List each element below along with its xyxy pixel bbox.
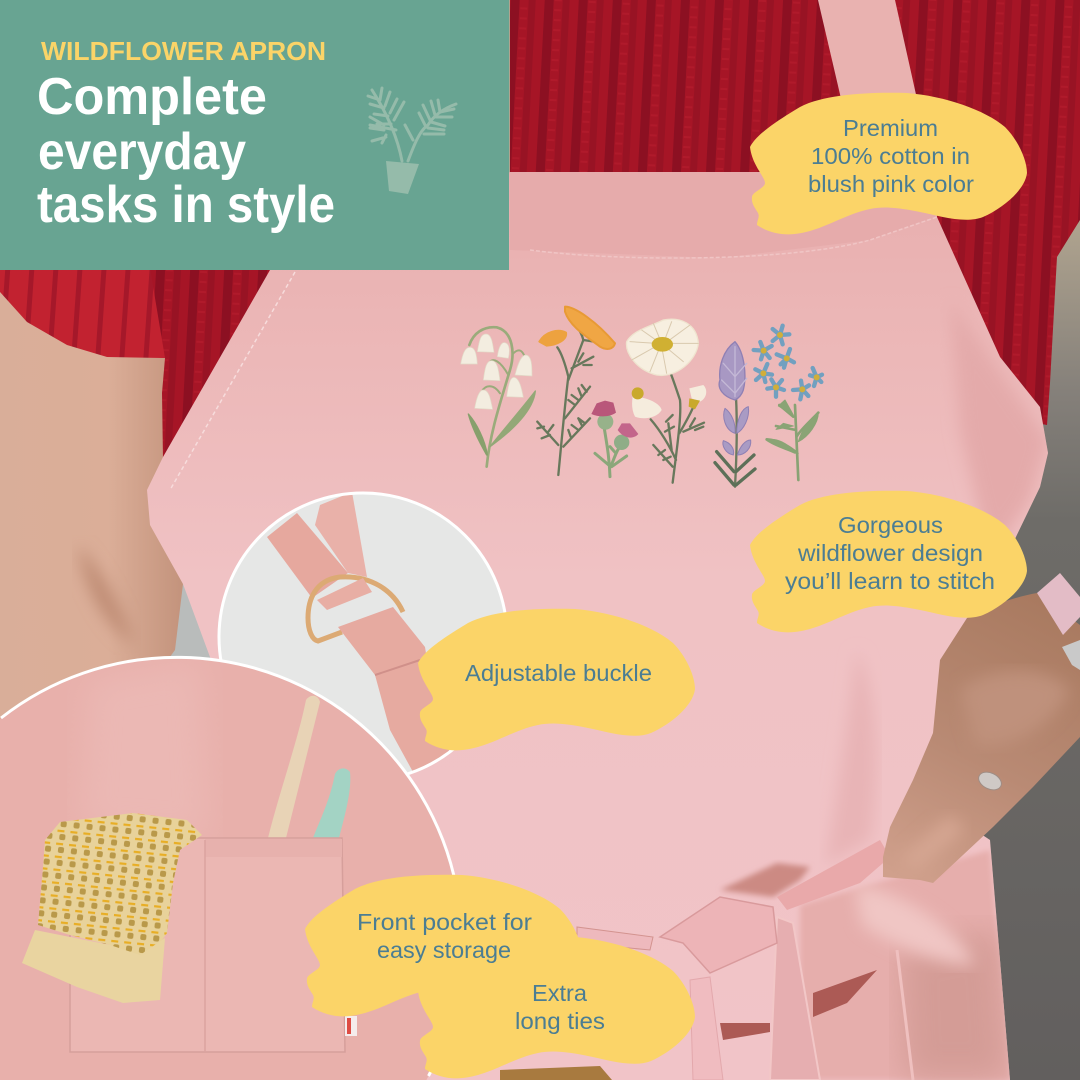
red sleeve left	[0, 268, 180, 358]
callout: front pocket	[305, 875, 582, 1016]
thistle	[591, 401, 638, 477]
upper left strap	[267, 513, 348, 598]
red sweater under arm	[150, 268, 290, 460]
daisy	[627, 319, 706, 483]
lower strap	[338, 607, 450, 772]
hanging tie right	[770, 917, 820, 1080]
upper right strap	[315, 492, 367, 577]
title: tasks in style	[37, 176, 335, 234]
callout text: extra long ties	[515, 980, 605, 1034]
callout: front pocket: easy storage	[377, 937, 511, 963]
embroidered wildflowers	[461, 307, 822, 487]
icon: potted plant	[368, 88, 456, 194]
callout: premium cotton: Premium	[843, 115, 938, 141]
red sweater right and neck	[510, 0, 1080, 425]
towel fringe	[22, 930, 165, 1003]
right hand	[883, 573, 1080, 883]
callout: premium cotton	[750, 93, 1027, 234]
callout: premium cotton: blush pink color	[808, 171, 974, 197]
callout: premium cotton: 100% cotton in	[811, 143, 970, 169]
left waist ribbon	[577, 927, 653, 950]
callout text: extra long ties: Extra	[532, 980, 587, 1006]
side seam	[170, 272, 295, 490]
icon: D-ring buckle	[308, 577, 403, 641]
icon: wooden spoon	[268, 696, 320, 838]
callout: wildflower design: you’ll learn to stitch	[785, 568, 995, 594]
callout: front pocket: Front pocket for	[357, 909, 532, 935]
header panel	[0, 0, 509, 270]
woven item at bottom edge	[500, 1066, 612, 1080]
shadow above tie	[720, 863, 810, 897]
yarrow and tansy	[537, 307, 615, 475]
folded towel	[38, 813, 202, 955]
hanging tie left	[690, 977, 723, 1080]
bow knot	[660, 897, 777, 973]
watch clasp	[1062, 640, 1080, 670]
lily of the valley	[461, 327, 535, 467]
fabric folds and shading	[522, 250, 1048, 1080]
left arm	[0, 285, 183, 735]
gap behind arm	[165, 570, 225, 670]
pocket	[70, 838, 345, 1052]
forget-me-not	[754, 326, 822, 480]
icon: ring	[976, 769, 1004, 793]
callout: adjustable buckle: Adjustable buckle	[465, 660, 652, 686]
callout shape: extra long ties	[418, 937, 695, 1078]
side pocket opening	[720, 970, 877, 1040]
apron body	[147, 172, 1048, 1080]
eyebrow: WILDFLOWER APRON	[41, 36, 326, 66]
neck strap	[818, 0, 935, 180]
watch strap	[1037, 573, 1080, 635]
title: Complete	[37, 68, 267, 126]
icon: mint spatula	[313, 768, 350, 838]
circle inset: front pocket	[0, 657, 462, 1080]
waist tie	[777, 840, 890, 910]
circle inset: adjustable buckle	[219, 492, 507, 781]
callout: wildflower design	[750, 491, 1027, 632]
callout: wildflower design: Gorgeous	[838, 512, 943, 538]
callout: wildflower design: wildflower design	[797, 540, 983, 566]
pocket seam	[897, 950, 913, 1080]
callout text: extra long ties: long ties	[515, 1008, 605, 1034]
callout: adjustable buckle	[418, 609, 695, 750]
lavender	[715, 342, 755, 487]
title: everyday	[38, 123, 246, 181]
strap loop	[317, 578, 372, 610]
top seam	[530, 217, 937, 258]
label tag	[345, 1016, 357, 1036]
title	[37, 68, 335, 234]
